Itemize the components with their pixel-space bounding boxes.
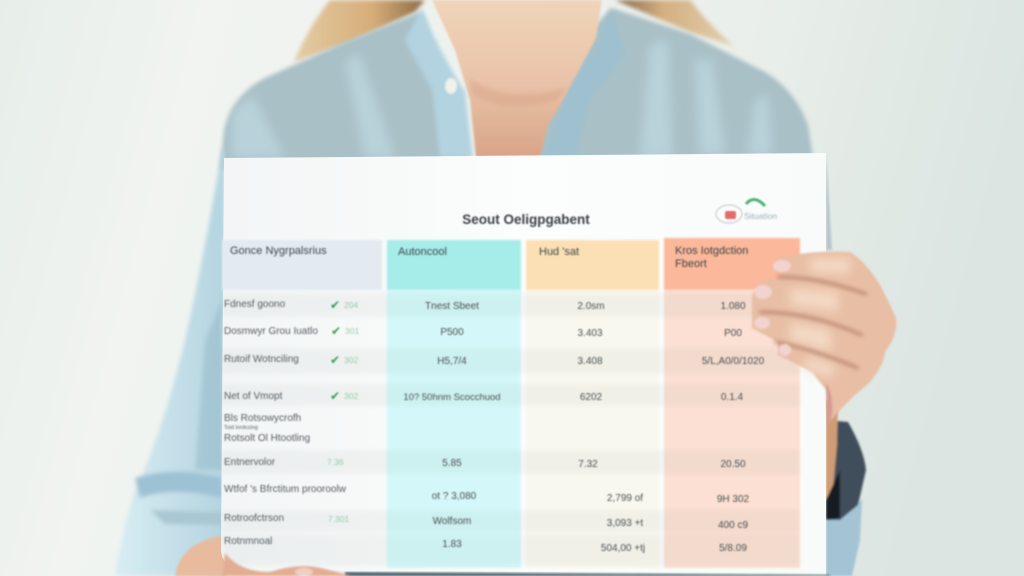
table column backgrounds — [222, 238, 800, 568]
header labels: Hud 'sat — [539, 246, 579, 258]
green checks — [327, 298, 359, 524]
green checks: 7.36 — [327, 457, 344, 467]
green checks: ✔ — [330, 353, 340, 367]
fingernails — [754, 260, 791, 356]
row labels: Rotnmnoal — [224, 536, 272, 547]
row shading — [222, 293, 800, 566]
green checks: 7.301 — [328, 514, 350, 524]
left wrist — [175, 535, 225, 576]
green checks: 302 — [344, 391, 358, 401]
green checks: ✔ — [330, 298, 340, 312]
logo — [716, 199, 777, 223]
row labels — [224, 299, 347, 547]
header labels: Kros Iotgdction — [675, 245, 748, 257]
person — [115, 0, 866, 576]
left sleeve — [115, 150, 225, 576]
shirt fold highlights — [232, 40, 772, 158]
green checks: ✔ — [330, 389, 340, 403]
row labels: Net of Vmopt — [224, 391, 283, 402]
column 1 header — [222, 240, 382, 290]
header labels: Fbeort — [675, 258, 707, 270]
column 2 values: ot ? 3,080 — [432, 491, 477, 502]
column 2 values: Tnest Sbeet — [425, 301, 479, 312]
paper sheet — [221, 153, 826, 574]
column 3 values: 6202 — [580, 392, 603, 403]
column 3 values: 2,799 of — [607, 493, 643, 504]
hair — [294, 0, 734, 62]
logo: Situation — [744, 211, 777, 221]
title: Seout Oeligpgabent — [462, 212, 590, 227]
green checks: 302 — [344, 355, 358, 365]
header fourth — [664, 238, 800, 290]
column 3 — [526, 290, 659, 568]
shirt collar and placket — [405, 8, 625, 158]
column 4 values: 0.1.4 — [721, 392, 744, 403]
row labels: Fdnesf goono — [224, 299, 286, 310]
bottom shadow below sheet — [345, 572, 830, 576]
row labels: Rotroofctrson — [224, 513, 284, 524]
column 3 values: 504,00 +tj — [601, 543, 645, 554]
column 4 values: 20.50 — [720, 459, 746, 470]
column 4 values: 400 c9 — [718, 520, 748, 531]
shirt body — [220, 8, 815, 170]
header third — [526, 240, 659, 290]
green checks: 301 — [345, 326, 359, 336]
column 4 values: P00 — [724, 328, 742, 339]
column 3 values — [577, 301, 645, 554]
column 3 values: 3,093 +t — [607, 518, 643, 529]
row labels: Rotsolt Ol Htootling — [224, 433, 310, 444]
column 2 — [387, 290, 521, 568]
header labels: Autoncool — [398, 246, 447, 258]
column 2 values: 1.83 — [442, 539, 462, 550]
row labels: Dosmwyr Grou Iuatlo — [224, 326, 318, 337]
column 4 — [664, 290, 800, 568]
column 4 values: 1.080 — [720, 301, 746, 312]
row labels: Toid lordozing — [224, 425, 258, 431]
column 4 values: 9H 302 — [717, 494, 750, 505]
table text — [224, 245, 765, 554]
header labels — [230, 245, 748, 270]
column 2 values: H5,7/4 — [437, 356, 467, 367]
column 3 values: 7.32 — [578, 459, 598, 470]
green checks: ✔ — [331, 324, 341, 338]
header labels: Gonce Nygrpalsrius — [230, 245, 327, 257]
finger highlights — [790, 258, 850, 378]
column 4 values: 5/8.09 — [719, 543, 747, 554]
row labels: Rutoif Wotnciling — [224, 354, 299, 365]
row labels: Wtfof 's Bfrctitum prooroolw — [224, 484, 347, 495]
column 2 values: P500 — [440, 327, 464, 338]
finger creases — [760, 277, 866, 368]
column 3 values: 3.408 — [577, 356, 603, 367]
neck and chest — [432, 0, 602, 158]
right sleeve — [826, 400, 866, 576]
shirt behind top right of sheet — [826, 150, 832, 250]
hand at bottom left — [222, 553, 352, 576]
row labels: Entnervolor — [224, 457, 276, 468]
hand base — [752, 252, 896, 426]
column 4 values: 5/L,A0/0/1020 — [702, 356, 765, 367]
column 2 values: 10? 50hnm Scocchuod — [403, 392, 501, 403]
green checks: 204 — [344, 300, 358, 310]
hand at right — [752, 252, 896, 426]
column 3 values: 3.403 — [577, 328, 603, 339]
neck shadow — [470, 78, 565, 106]
column 4 values — [702, 301, 765, 554]
column 3 values: 2.0sm — [577, 301, 605, 312]
column 2 values: 5.85 — [442, 458, 462, 469]
row labels: Bls Rotsowycrofh — [224, 413, 301, 424]
shirt button — [445, 78, 457, 94]
header autonomous — [387, 240, 521, 290]
column 2 values — [403, 301, 501, 550]
column 2 values: Wolfsom — [433, 516, 471, 527]
